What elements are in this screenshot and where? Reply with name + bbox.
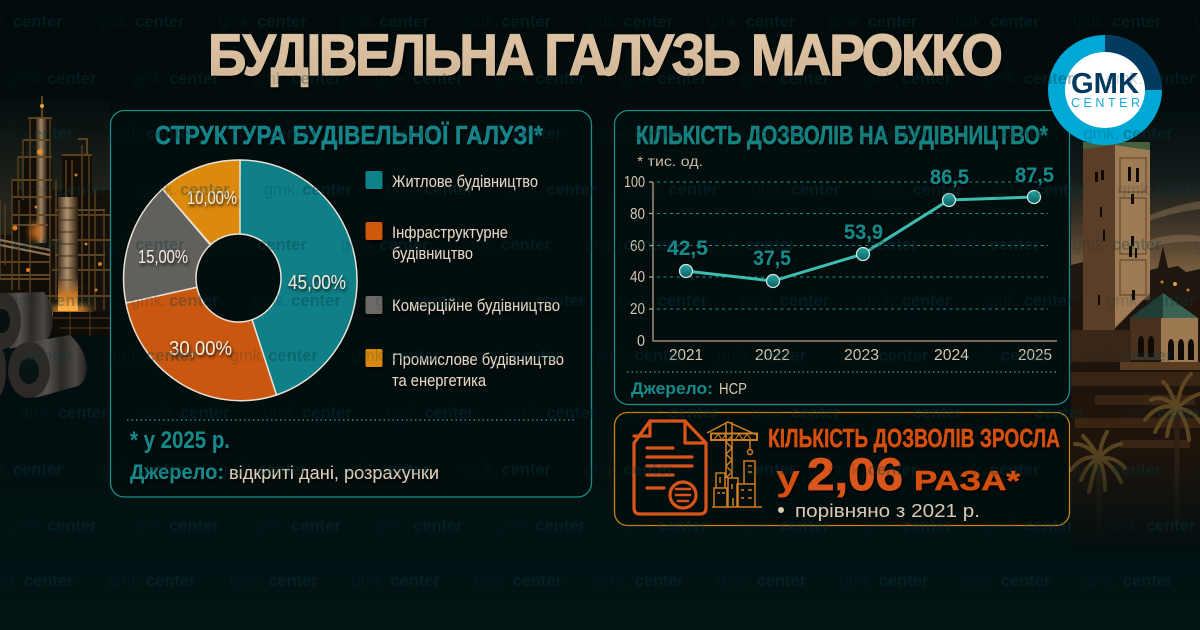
legend: будівництво bbox=[392, 244, 473, 263]
line chart: 53,9 bbox=[844, 221, 883, 244]
logo: GMK Center: CENTER bbox=[1071, 96, 1140, 110]
heading: structure: СТРУКТУРА БУДІВЕЛЬНОЇ ГАЛУЗІ* bbox=[155, 121, 543, 150]
watermark pattern: center center center center center center center center center center bbox=[47, 517, 1196, 535]
logo: GMK Center: GMK bbox=[1071, 68, 1139, 100]
watermark pattern: center center center center center center center center center center bbox=[13, 13, 1162, 31]
line chart: 42,5 bbox=[667, 237, 708, 260]
heading: permits: КІЛЬКІСТЬ ДОЗВОЛІВ НА БУДІВНИЦТВО* bbox=[636, 121, 1049, 150]
line chart: 2024 bbox=[934, 347, 969, 364]
logo: GMK Center bbox=[1048, 35, 1162, 145]
line chart: 60 bbox=[630, 238, 645, 255]
donut value labels bbox=[138, 188, 346, 360]
donut chart bbox=[124, 160, 357, 401]
line chart: 2023 bbox=[844, 347, 879, 364]
legend bbox=[366, 171, 564, 390]
illustration: Moroccan minaret, city and palms bbox=[1071, 110, 1200, 551]
line chart: 37,5 bbox=[753, 247, 791, 270]
callout figure bbox=[776, 449, 1020, 500]
watermark pattern: center center center center center center center center center center bbox=[47, 70, 1196, 88]
donut value labels: 10,00% bbox=[187, 188, 237, 208]
icon: document bbox=[634, 421, 706, 514]
line chart: 2021 bbox=[669, 347, 703, 364]
watermark pattern: center center center center center center center center center center bbox=[13, 461, 1162, 479]
legend: Промислове будівництво bbox=[392, 350, 564, 369]
line chart: 2025 bbox=[1018, 347, 1052, 364]
callout note: порівняно з 2021 р. bbox=[795, 500, 980, 521]
source: permits: НСР bbox=[719, 381, 747, 398]
icon: crane and buildings bbox=[707, 422, 762, 507]
panel: construction permits bbox=[614, 110, 1070, 404]
line chart: 2022 bbox=[755, 347, 790, 364]
source: structure: Джерело: bbox=[130, 461, 224, 484]
donut value labels: 15,00% bbox=[138, 247, 188, 267]
line chart bbox=[624, 164, 1057, 364]
steel coils bbox=[0, 292, 87, 398]
line chart: 40 bbox=[630, 269, 645, 286]
palm trees bbox=[1071, 374, 1200, 545]
watermark pattern: center center center center center center center center center center bbox=[58, 404, 1200, 422]
watermark pattern: center center center center center center center center center center bbox=[47, 292, 1196, 310]
watermark pattern: center center center center center center center center center center bbox=[24, 347, 1173, 365]
title: БУДІВЕЛЬНА ГАЛУЗЬ МАРОККО bbox=[208, 23, 1003, 87]
illustration: refinery and steel coils bbox=[0, 96, 110, 398]
callout headline: КІЛЬКІСТЬ ДОЗВОЛІВ ЗРОСЛА bbox=[768, 423, 1060, 453]
watermark pattern: center center center center center center center center center center bbox=[24, 125, 1173, 143]
legend: Житлове будівництво bbox=[392, 172, 538, 191]
donut value labels: 30,00% bbox=[169, 338, 232, 360]
panel: construction structure bbox=[110, 110, 592, 497]
source: structure: відкриті дані, розрахунки bbox=[229, 463, 439, 483]
callout figure: у bbox=[776, 457, 800, 498]
callout figure: РАЗА* bbox=[914, 465, 1020, 496]
footnote: year: * у 2025 р. bbox=[130, 427, 230, 454]
legend: та енергетика bbox=[392, 371, 486, 390]
donut value labels: 45,00% bbox=[288, 272, 346, 294]
legend: Комерційне будівництво bbox=[392, 296, 560, 315]
watermark pattern: center center center center center center center center center center bbox=[13, 236, 1162, 254]
unit note: * тис. од. bbox=[637, 153, 703, 169]
line chart: 87,5 bbox=[1015, 164, 1054, 187]
line chart: 100 bbox=[624, 174, 645, 191]
source: structure bbox=[130, 461, 439, 484]
callout figure: 2,06 bbox=[807, 449, 903, 500]
callout: permits growth bbox=[614, 412, 1070, 526]
line chart: 86,5 bbox=[930, 166, 969, 189]
legend: Інфраструктурне bbox=[392, 223, 508, 242]
line chart: 0 bbox=[637, 333, 645, 350]
source: permits: Джерело: bbox=[631, 379, 713, 398]
watermark pattern: center center center center center center center center center center bbox=[24, 572, 1173, 590]
line chart: 80 bbox=[630, 206, 645, 223]
line chart: 20 bbox=[630, 301, 645, 318]
watermark pattern: center center center center center center center center center center bbox=[58, 181, 1200, 199]
source: permits bbox=[631, 379, 747, 398]
